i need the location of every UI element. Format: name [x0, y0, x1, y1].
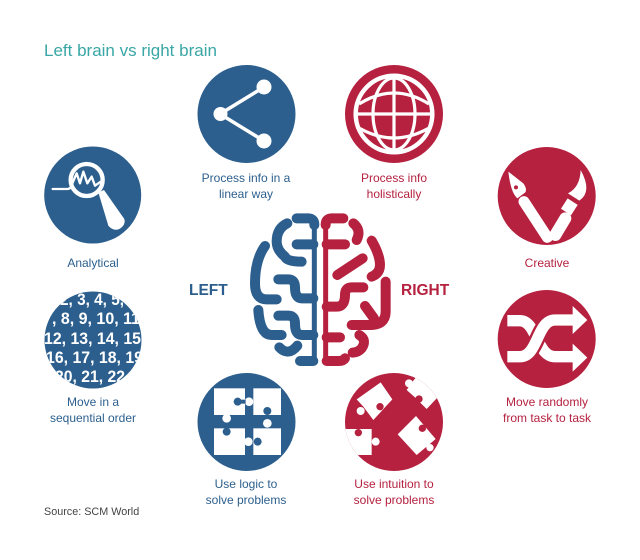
right hemisphere — [326, 218, 386, 361]
caption: linear: Process info in a — [202, 171, 291, 185]
label: left: LEFT — [189, 282, 228, 299]
caption: intuition: Use intuition to — [354, 477, 434, 491]
icon: numbers disc — [44, 291, 143, 388]
label: right: RIGHT — [401, 282, 450, 299]
caption: logic: solve problems — [206, 493, 286, 507]
icon: numbers disc: 12, 13, 14, 15 — [44, 330, 141, 348]
left hemisphere — [255, 218, 314, 361]
caption: creative: Creative — [525, 256, 570, 270]
icon: shuffle arrows — [498, 290, 596, 388]
caption: sequential: sequential order — [50, 411, 136, 425]
icon: pen and brush — [498, 147, 596, 245]
panel: logic — [198, 373, 296, 507]
icon: numbers disc: 20, 21, 22 — [55, 368, 125, 386]
caption: logic: Use logic to — [215, 477, 278, 491]
source note: Source: SCM World — [44, 506, 139, 518]
icon: scattered puzzle — [345, 373, 443, 471]
caption: random: from task to task — [503, 411, 592, 425]
icon: numbers disc: 2, 3, 4, 5, — [60, 291, 124, 309]
panel: sequential — [44, 291, 143, 425]
panel: random — [498, 290, 596, 425]
caption: holistic: Process info — [361, 171, 427, 185]
caption: holistic: holistically — [367, 187, 421, 201]
title: Left brain vs right brain — [44, 41, 217, 60]
caption: analytical: Analytical — [67, 256, 119, 270]
panel: analytical — [44, 146, 141, 270]
panel: holistic — [345, 65, 443, 201]
caption: linear: linear way — [219, 187, 273, 201]
panel: linear — [198, 65, 296, 201]
panel: intuition — [345, 373, 443, 506]
panel: creative — [498, 147, 596, 270]
icon: magnifier — [44, 146, 141, 244]
icon: share — [198, 65, 296, 163]
caption: sequential: Move in a — [67, 395, 119, 409]
caption: random: Move randomly — [506, 395, 588, 409]
icon: globe — [345, 65, 443, 163]
icon: numbers disc: 16, 17, 18, 19 — [46, 349, 143, 367]
icon: brain — [255, 218, 386, 361]
caption: intuition: solve problems — [354, 493, 434, 507]
icon: ordered puzzle — [198, 373, 296, 471]
icon: numbers disc: , 8, 9, 10, 11 — [52, 310, 140, 328]
